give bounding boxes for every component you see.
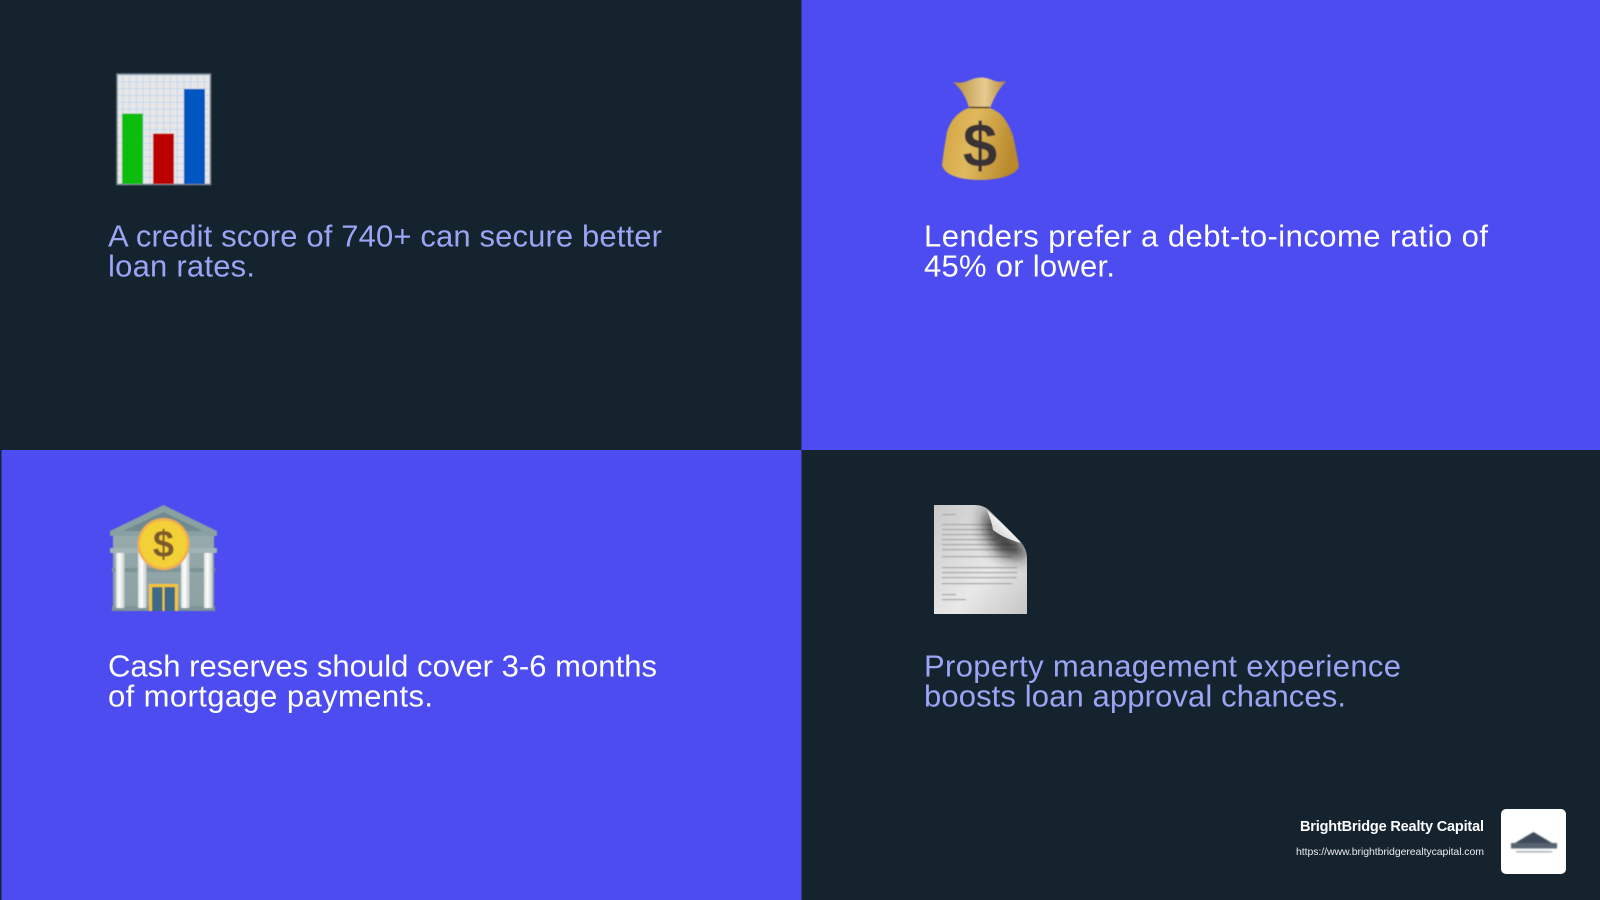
text: property management [924,648,1401,714]
text: debt to income: 45% or lower. [924,248,1115,284]
text: cash reserves: of mortgage payments. [108,678,433,714]
panel: property management [926,505,1566,874]
panel: credit score [2,0,802,450]
text: cash reserves: Cash reserves should cover 3-6 months [108,648,657,684]
icon: bar chart [117,74,210,184]
text: property management: Property management experience [924,648,1401,684]
company url: https://www.brightbridgerealtycapital.com [1296,846,1484,858]
text: debt to income [924,218,1488,284]
text: property management: boosts loan approval chances. [924,678,1346,714]
icon: bank [110,505,217,611]
text: credit score [108,218,662,284]
icon: bank: $ [153,524,174,566]
icon: money bag [942,78,1019,181]
text: cash reserves [108,648,657,714]
logo [1501,809,1566,874]
company name: BrightBridge Realty Capital [1300,819,1484,835]
icon: money bag: $ [963,112,997,181]
text: credit score: A credit score of 740+ can secure better [108,218,662,254]
panel: debt to income [802,0,1600,450]
text: credit score: loan rates. [108,248,255,284]
brand block [1296,809,1566,874]
text: debt to income: Lenders prefer a debt-to-income ratio of [924,218,1488,254]
icon: document [934,505,1027,614]
panel: cash reserves [2,450,802,900]
